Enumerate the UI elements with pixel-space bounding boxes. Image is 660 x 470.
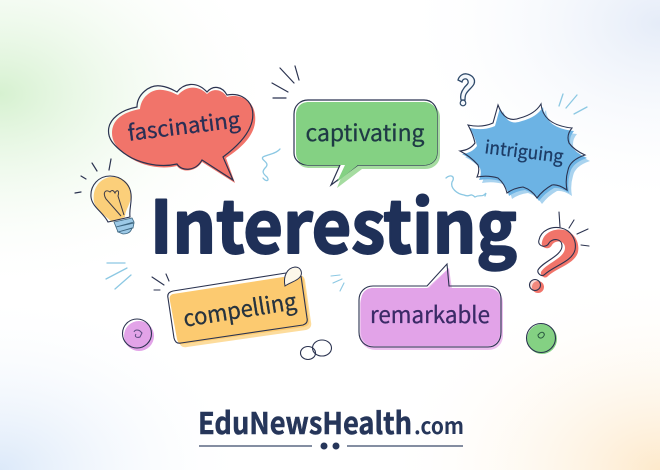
brand domain: .com — [414, 409, 464, 441]
icon: sparks by compelling card — [152, 274, 169, 290]
icon: blue rays centre — [331, 275, 344, 291]
icon: outlined question mark — [458, 74, 475, 106]
icon: folded corner — [284, 267, 301, 286]
icon: blue rays right — [559, 94, 587, 114]
brand footer — [198, 399, 464, 450]
icon: blue squiggle right — [446, 176, 486, 197]
speech bubble: fascinating — [108, 84, 255, 183]
label: compelling: compelling — [181, 282, 299, 334]
speech bubble: captivating — [294, 100, 440, 188]
brand name: EduNewsHealth — [198, 399, 412, 443]
icon: blue rays left — [106, 263, 131, 289]
icon: green circle — [526, 324, 557, 354]
icon: light bulb — [91, 176, 134, 234]
speech bubble: remarkable — [359, 264, 503, 350]
label: intriguing: intriguing — [483, 133, 565, 169]
speech burst: intriguing — [460, 104, 590, 204]
label: fascinating: fascinating — [126, 102, 242, 148]
card: compelling — [168, 267, 311, 347]
divider with dots — [199, 442, 463, 450]
label: remarkable: remarkable — [370, 296, 490, 330]
icon: red question mark — [530, 228, 578, 293]
icon: linked rings — [300, 340, 332, 360]
icon: purple circle — [122, 319, 154, 351]
icon: red question rays — [559, 212, 589, 246]
label: captivating: captivating — [306, 114, 425, 148]
icon: blue squiggle left — [262, 149, 280, 181]
icon: sparkle lines top — [272, 66, 299, 98]
main title: Interesting — [150, 169, 517, 274]
icon: bulb rays — [75, 159, 111, 193]
